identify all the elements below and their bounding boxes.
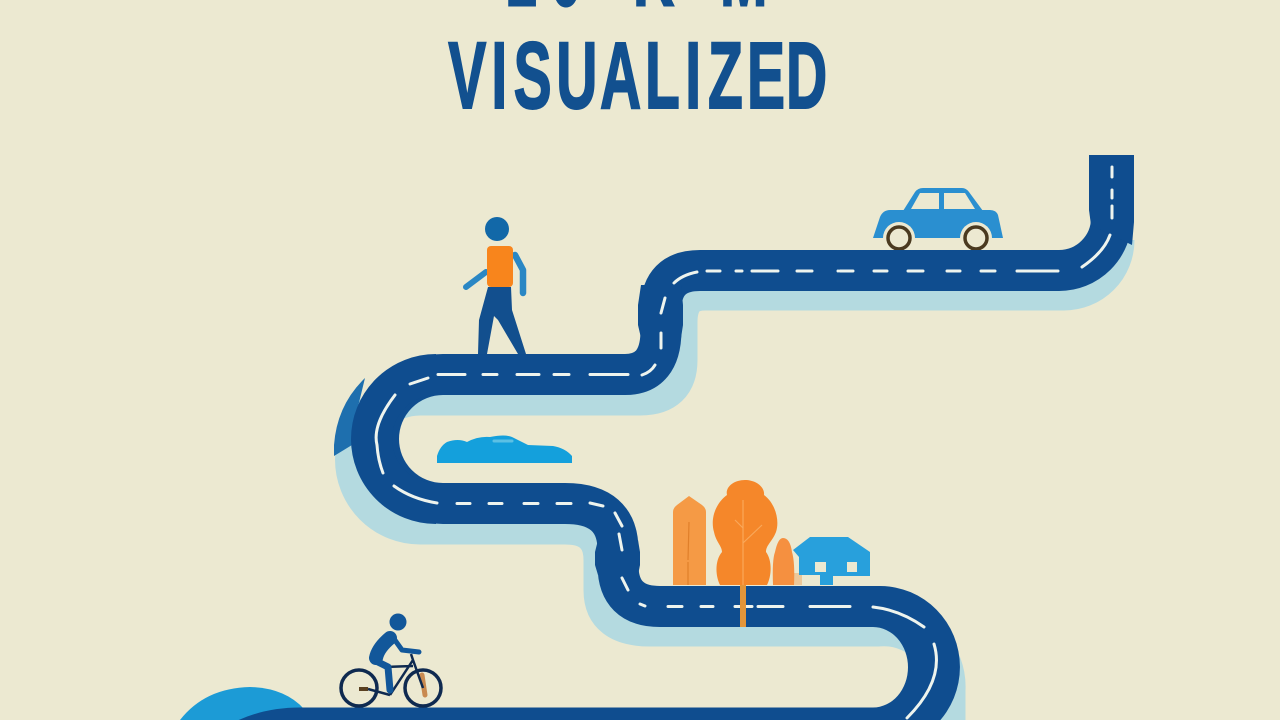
icon: car	[870, 188, 1003, 254]
road left edge highlight	[334, 378, 365, 456]
road	[215, 155, 1134, 720]
icon: tall orange tree	[673, 496, 706, 585]
icon: small orange tree	[773, 538, 802, 585]
icon: cyclist	[341, 614, 441, 706]
title: VISUALIZED	[448, 22, 827, 129]
icon: blue hill	[180, 687, 304, 720]
icon: blue cloud	[437, 436, 572, 463]
icon: blue house	[793, 537, 870, 585]
road lane markings	[376, 167, 1112, 718]
road shadow	[356, 240, 1114, 720]
icon: round orange tree	[713, 480, 777, 627]
icon: walking person	[466, 217, 526, 354]
